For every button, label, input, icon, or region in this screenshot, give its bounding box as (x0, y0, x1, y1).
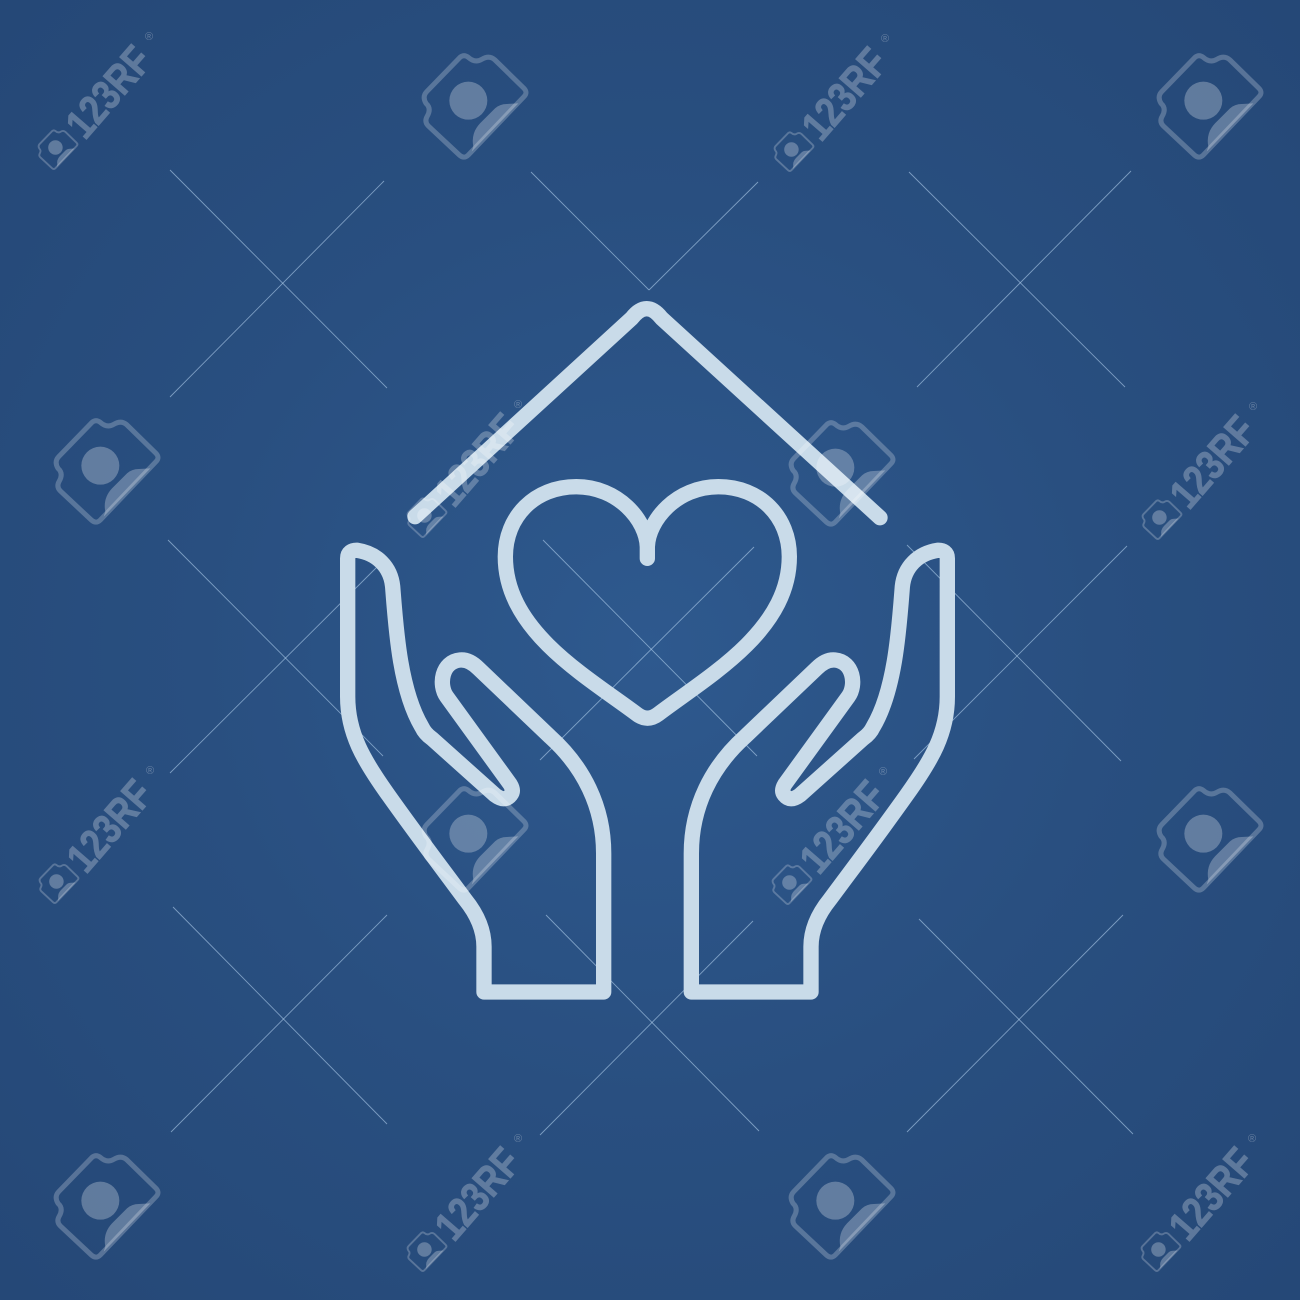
watermark: logo and 123RF row 1 col 1 (39, 31, 161, 169)
icon: right hand (691, 550, 947, 992)
icon: house roof (415, 309, 880, 518)
watermark: large logo row 1 col 2 (424, 56, 526, 157)
watermark: large logo row 2 col 3 (791, 423, 893, 524)
watermark: logo and 123RF row 4 col 4: ® (1248, 1133, 1256, 1145)
watermark: large logo row 1 col 4 (1159, 56, 1261, 157)
watermark: logo and 123RF row 2 col 2 (408, 399, 530, 537)
watermark: logo and 123RF row 3 col 3 (773, 766, 895, 904)
watermark: large logo row 4 col 1 (56, 1156, 158, 1257)
watermark: logo and 123RF row 1 col 3: 123RF (792, 39, 897, 149)
watermark: logo and 123RF row 3 col 3: ® (879, 766, 887, 778)
watermark: large logo row 3 col 2 (424, 789, 526, 890)
watermark: logo and 123RF row 4 col 4 (1142, 1133, 1264, 1271)
watermark: logo and 123RF row 3 col 1 (40, 765, 162, 903)
watermark: logo and 123RF row 2 col 4 (1143, 401, 1265, 539)
watermark: logo and 123RF row 4 col 2: ® (514, 1133, 522, 1145)
watermark: logo and 123RF row 3 col 1: 123RF (57, 771, 162, 881)
watermark: logo and 123RF row 1 col 3 (775, 33, 897, 171)
watermark: logo and 123RF row 1 col 1: ® (145, 31, 153, 43)
watermark: logo and 123RF row 4 col 2: 123RF (425, 1139, 530, 1249)
icon: heart (505, 487, 789, 718)
watermark: large logo row 4 col 3 (791, 1156, 893, 1257)
watermark: logo and 123RF row 4 col 4: 123RF (1159, 1139, 1264, 1249)
watermark: logo and 123RF row 2 col 4: ® (1249, 401, 1257, 413)
watermark: large logo row 2 col 1 (56, 421, 158, 522)
watermark: logo and 123RF row 2 col 2: ® (514, 399, 522, 411)
icon: left hand (348, 550, 604, 992)
watermark: logo and 123RF row 2 col 4: 123RF (1160, 407, 1265, 517)
watermark: logo and 123RF row 3 col 1: ® (146, 765, 154, 777)
watermark: logo and 123RF row 4 col 2 (408, 1133, 530, 1271)
watermark: logo and 123RF row 1 col 3: ® (881, 33, 889, 45)
watermark: logo and 123RF row 2 col 2: 123RF (425, 405, 530, 515)
watermark: large logo row 3 col 4 (1159, 789, 1261, 890)
watermark: logo and 123RF row 1 col 1: 123RF (56, 37, 161, 147)
watermark: logo and 123RF row 3 col 3: 123RF (790, 772, 895, 882)
icon: hands holding house with heart (348, 309, 947, 992)
